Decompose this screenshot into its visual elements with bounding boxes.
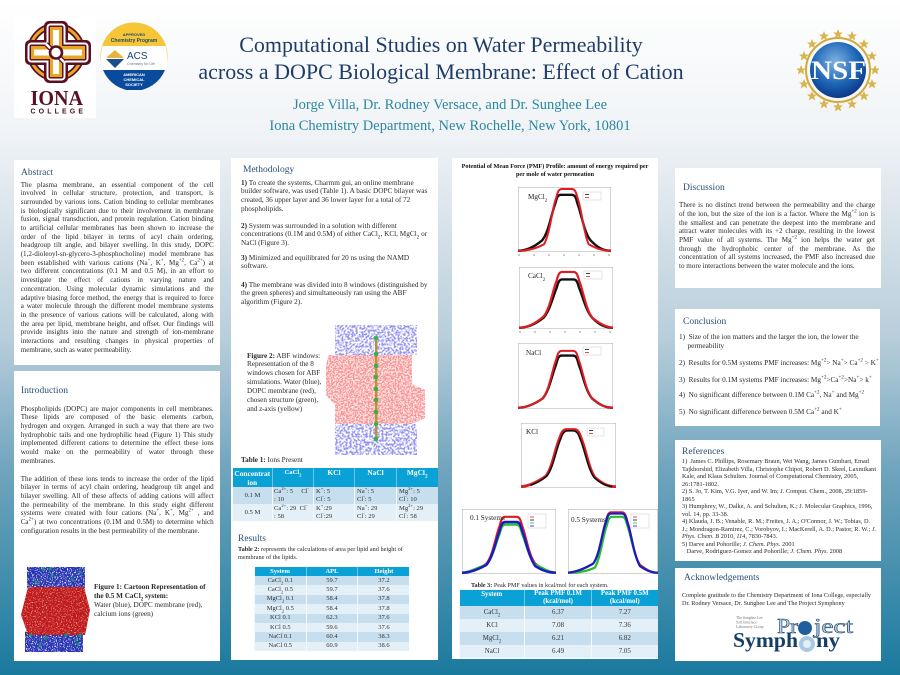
text: reference list: Kale, and Klaus Schulten. Journal of Computational Chemistry, 2005,	[682, 473, 858, 480]
text: method step 4: algorithm (Figure 2).	[241, 298, 302, 306]
table 1: ions present: Cl-: 58	[399, 510, 417, 520]
text: abstract body: headgroup tilt angle, and bilayer swelling. In this study, DOPC	[21, 241, 214, 249]
table 1: ions present	[232, 468, 438, 521]
text: method step 3: software.	[241, 262, 268, 270]
logo: ACS approved chemistry program: AMERICAN	[123, 72, 145, 77]
logo: Iona College: IONA	[30, 86, 84, 110]
table 1: ions present: Na+: 29	[357, 503, 377, 512]
text: abstract body: investigate the effect of cations in varying nature and	[21, 276, 214, 284]
text: acknowledgements body	[682, 592, 871, 607]
logo: ACS approved chemistry program: APPROVED	[123, 32, 145, 37]
text: method step 3: 3) Minimized and equilibrated for 20 ns using the NAMD	[241, 254, 409, 262]
text: method step 1	[241, 179, 428, 213]
text: conclusion list: 4) No significant difference between 0.1M Ca+2, Na+ and Mg+2	[679, 389, 864, 399]
table 2: APL and height	[254, 567, 409, 651]
table 2: APL and height: APL	[325, 568, 338, 574]
table 2: APL and height: MgCl2 0.1	[267, 595, 294, 604]
caption: table 3: Table 3: Peak PMF values in kcal/mol for each system.	[471, 582, 609, 589]
panel: discussion	[675, 168, 881, 288]
text: introduction paragraph 2: bilayer swelling. All of these affects of adding cations will affect	[21, 492, 214, 500]
title: Computational Studies on Water Permeability	[239, 32, 643, 57]
table 1: ions present: Cl-: 5	[316, 493, 331, 502]
table 2: APL and height: 58.4	[326, 595, 338, 602]
text: introduction paragraph 2: configuration results in the best permeability of the membrane.	[21, 527, 199, 535]
table 2: APL and height: 37.8	[378, 595, 390, 602]
table 3: peak PMF values: Peak PMF 0.5M	[601, 590, 649, 597]
text: abstract body: membrane, such as water permeability.	[21, 346, 131, 354]
text: conclusion list: 3) Results for 0.1M systems PMF increases: Mg+2>Ca+2>Na+> k+	[679, 374, 872, 384]
table 1: ions present: Cl-: 10	[399, 493, 417, 502]
text: discussion body: attract water molecules with its +2 charge, resulting in the lowest	[679, 227, 875, 235]
caption: figure 1: Figure 1: Cartoon Representation of	[94, 583, 206, 591]
text: reference list: J.; Mondragon-Ramirez, C.; Vorobyov, I.; MacKerell, A. D.; Pastor, R. W.; J.	[682, 526, 876, 533]
table 2: APL and height: 58.4	[326, 605, 338, 612]
table 3: peak PMF values: 7.36	[619, 622, 631, 629]
text: introduction paragraph 2: The addition of these ions tends to increase the order of the lipid	[21, 475, 214, 483]
text: method step 2: concentrations (0.1M and 0.5M) of either CaCl2, KCl, MgCl2 or	[241, 230, 427, 241]
text: method step 1: created, 36 upper layer and 36 lower layer for a total of 72	[241, 196, 410, 204]
table 2: APL and height: 37.6	[378, 624, 390, 631]
table 2: APL and height: 60.9	[326, 642, 338, 649]
text: reference list: 1) James C. Phillips, Rosemary Braun, Wei Wang, James Gumbart, Emad	[682, 458, 869, 465]
text: abstract body: The plasma membrane, an essential component of the cell	[21, 181, 214, 189]
text: reference list: Tajkhorshid, Elizabeth Villa, Christophe Chipot, Robert D. Skeel, Laxmikant	[682, 466, 876, 473]
text: introduction paragraph 1: Phospholipids (DOPC) are major components in cell membranes.	[21, 405, 214, 413]
text: discussion body: the smallest and can penetrate the deepest into the membrane and	[679, 219, 875, 227]
table 1: ions present: ion	[247, 478, 257, 486]
chart: 0.5 systems: 0.5 Systems	[571, 516, 606, 524]
text: conclusion list: 1) Size of the ion matters and the larger the ion, the lower the	[679, 333, 859, 341]
caption: figure 2: Representation of the 8	[247, 360, 314, 368]
table 2: APL and height: KCl 0.5	[270, 624, 291, 631]
text: introduction paragraph 2: bilayer in terms of acyl chain ordering, headgroup tilt angel and	[21, 483, 214, 491]
text: introduction paragraph 1	[20, 405, 214, 465]
text: reference list	[682, 458, 876, 555]
text: reference list: Darve, Rodriguez-Gomez and Pohorille; J. Chem. Phys. 2008	[687, 548, 842, 555]
text: reference list: 2) S. Jo, T. Kim, V.G. Iyer, and W. Im; J. Comput. Chem., 2008, 29:1859-	[682, 488, 868, 495]
table 3: peak PMF values: Peak PMF 0.1M	[534, 590, 582, 597]
heading: discussion: Discussion	[683, 183, 725, 193]
table 3: peak PMF values: 7.05	[619, 648, 631, 655]
table 3: peak PMF values: 6.49	[552, 648, 564, 655]
text: conclusion list: 5) No significant difference between 0.5M Ca+2 and K+	[679, 406, 842, 416]
text: discussion body: to more interactions between the water molecule and the ions.	[679, 262, 855, 270]
table 1: ions present: K+: 5	[316, 486, 330, 495]
table 2: APL and height: 60.4	[326, 633, 338, 640]
table 1: ions present: Cl-: 29	[357, 510, 375, 520]
text: discussion body	[679, 201, 875, 270]
table 3: peak PMF values: NaCl	[485, 648, 499, 655]
chart: 0.1 systems: 0.1 Systems	[470, 514, 505, 522]
text: introduction paragraph 2: Ca2+) at two concentrations (0.1M and 0.5M) to determine which	[21, 518, 214, 526]
text: introduction paragraph 1: implemented different cations to determine the effect these ions	[21, 439, 214, 447]
text: acknowledgements body: Dr. Rodney Versace, Dr. Sunghee Lee and The Project Symphony	[682, 600, 845, 607]
table 3: peak PMF values: System	[481, 591, 502, 598]
text: abstract body: is biologically significant due to their involvement in membrane	[21, 207, 214, 215]
text: method step 4: 4) The membrane was divided into 8 windows (distinguished by	[241, 281, 428, 289]
chart: NaCl	[518, 343, 613, 409]
logo: Iona College	[14, 17, 96, 118]
table 1: ions present: Ca2+: 29 Cl-	[274, 503, 307, 512]
table 1: ions present: 0.5 M	[245, 509, 260, 516]
text: table 2 description: Table 2: represents the calculations of area per lipid and height of	[238, 546, 403, 553]
table 2: APL and height: 38.6	[378, 642, 390, 649]
chart: CaCl2	[519, 267, 613, 332]
text: acknowledgements body: Complete gratitude to the Chemistry Department of Iona College, especially	[682, 592, 871, 599]
text: reference list: 3) Humphrey, W., Dalke, A. and Schulten, K.; J. Molecular Graphics, 1996,	[682, 503, 872, 510]
panel: methodology and results	[231, 158, 438, 660]
text: introduction paragraph 1: would make on the permeability of water through these	[21, 448, 214, 456]
text: method step 2: NaCl (Figure 3).	[241, 239, 289, 247]
heading: PMF profile: per mole of water permeation	[516, 171, 594, 178]
caption: figure 2: Figure 2: ABF windows:	[247, 352, 320, 360]
text: method step 1: 1) To create the systems, Charmm gui, an online membrane	[241, 179, 414, 187]
chart: 0.5 systems	[568, 509, 658, 574]
text: abstract body: two different concentrations (0.1 M and 0.5 M), in an effort to	[21, 267, 214, 275]
text: abstract body: (1,2-dioleoyl-sn-glycero-3-phosphocholine) model membrane has	[21, 250, 214, 258]
text: abstract body: in the presence of various cations will be calculated, along with	[21, 311, 214, 319]
text: method step 4: the green spheres) and simultaneously ran using the ABF	[241, 289, 407, 297]
caption: figure 1: the 0.5 M CaCl2 system:	[94, 592, 168, 602]
logo: ACS approved chemistry program: Chemistry for Life	[127, 62, 155, 66]
text: abstract body: provide insights into the nature and strength of ion-membrane	[21, 328, 214, 336]
authors and affiliation: Iona Chemistry Department, New Rochelle, New York, 10801	[269, 118, 631, 134]
heading: results: Results	[238, 534, 266, 544]
text: introduction paragraph 1: hydrogen and oxygen. Arranged in such a way that there are two	[21, 422, 214, 430]
caption: figure 1	[94, 583, 206, 618]
table 2: APL and height: 37.6	[378, 614, 390, 621]
heading: PMF profile	[462, 163, 648, 178]
table 2: APL and height: NaCl 0.5	[269, 642, 292, 649]
heading: abstract: Abstract	[21, 168, 53, 178]
logo: NSF: NSF	[811, 56, 866, 85]
caption: figure 2: DOPC membrane (red),	[247, 387, 316, 395]
table 2: APL and height: 37.6	[378, 586, 390, 593]
table 2: APL and height: KCl 0.1	[270, 614, 291, 621]
text: reference list: vol. 14, pp. 33-38.	[682, 511, 728, 518]
authors and affiliation: Jorge Villa, Dr. Rodney Versace, and Dr. Sunghee Lee	[293, 97, 607, 113]
logo: Project Symphony	[733, 614, 854, 652]
text: abstract body: order of the lipid bilayer in terms of acyl chain ordering,	[21, 233, 214, 241]
logo: NSF	[797, 29, 879, 111]
text: abstract body: been established with various cations (Na+, K+, Mg+2, Ca2+) at	[21, 258, 214, 267]
heading: acknowledgements: Acknowledgements	[684, 573, 759, 583]
caption: figure 2: chosen structure (green),	[247, 396, 318, 404]
logo: Project Symphony: Pr	[777, 614, 798, 638]
text: abstract body: to artificial cellular membranes has been shown to increase the	[21, 224, 214, 232]
text: conclusion list	[679, 333, 879, 416]
text: abstract body: involved in cellular structure, protection, and transport, is	[21, 189, 214, 197]
table 1: ions present: Ca2+: 5 Cl-	[274, 486, 309, 495]
figure 1: molecular system	[21, 567, 90, 652]
table 3: peak PMF values: 6.82	[619, 635, 631, 642]
text: method step 1: builder software, was used (Table 1). A basic DOPC bilayer was	[241, 187, 427, 195]
table 3: peak PMF values: CaCl2	[484, 609, 500, 618]
table 2: APL and height: CaCl2 0.1	[268, 577, 293, 585]
caption: figure 2: and z-axis (yellow)	[247, 405, 302, 413]
text: introduction paragraph 1: hydrophobic tails and one hydrophilic head (Figure 1) This study	[21, 431, 214, 439]
logo: ACS approved chemistry program: SOCIETY	[125, 82, 143, 87]
text: abstract body: fusion, signal transduction, and protein regulation. Cation binding	[21, 215, 214, 223]
table 2: APL and height: 62.3	[326, 614, 338, 621]
heading: introduction: Introduction	[21, 386, 68, 396]
table 3: peak PMF values: KCl	[486, 622, 498, 629]
table 1: ions present: CaCl2	[285, 469, 301, 477]
text: method step 4	[241, 281, 428, 306]
table 2: APL and height: MgCl2 0.5	[267, 605, 294, 613]
table 1: ions present: : 10	[274, 496, 284, 502]
text: method step 2	[241, 222, 428, 247]
table 2: APL and height: 37.8	[378, 605, 390, 612]
text: method step 2: 2) System was surrounded in a solution with different	[241, 222, 397, 230]
table 2: APL and height: 59.7	[326, 577, 338, 584]
table 3: peak PMF values: 7.08	[552, 622, 564, 629]
authors and affiliation	[269, 97, 631, 134]
table 3: peak PMF values: MgCl2	[483, 635, 501, 644]
text: table 2 description: membrane of the lipids.	[238, 554, 297, 561]
table 3: peak PMF values: (kcal/mol)	[543, 598, 573, 605]
logo: Iona College: COLLEGE	[30, 108, 83, 116]
panel: conclusion	[675, 309, 880, 426]
panel: abstract	[14, 160, 220, 365]
table 1: ions present: Cl-:29	[316, 510, 332, 520]
text: introduction paragraph 2: systems were created with four cations (Na+, K+, Mg2+ , and	[21, 509, 214, 517]
logo: ACS approved chemistry program: Chemistry Program	[111, 38, 158, 44]
caption: table 1: Table 1: Ions Present	[241, 456, 303, 464]
text: abstract body	[20, 181, 214, 354]
text: introduction paragraph 1: These lipids are composed of the basic elements carbon,	[21, 413, 214, 421]
panel: acknowledgements	[675, 568, 881, 661]
text: table 2 description	[238, 546, 403, 561]
chart: MgCl2: MgCl2	[528, 193, 548, 204]
logo: Project Symphony: Laboratory Group	[736, 625, 764, 629]
title	[198, 32, 684, 84]
table 1: ions present: Na+: 5	[357, 486, 374, 495]
text: introduction paragraph 2	[20, 475, 214, 535]
text: abstract body: a water molecule through the different model membrane systems	[21, 302, 214, 310]
table 3: peak PMF values: 6.37	[552, 609, 564, 616]
table 2: APL and height: NaCl 0.1	[269, 633, 292, 640]
heading: references: References	[682, 447, 724, 457]
table 1: ions present: K+:29	[316, 503, 332, 512]
table 1: ions present: : 58	[274, 512, 284, 520]
chart: KCl: KCl	[526, 428, 538, 436]
heading: PMF profile: Potential of Mean Force (PMF) Profile: amount of energy required per	[462, 163, 648, 170]
logo: ACS approved chemistry program	[100, 22, 168, 90]
text: introduction paragraph 2: the permeability of the membrane. In this study eight different	[21, 501, 214, 509]
logo: Project Symphony: ject	[813, 614, 853, 638]
text: method step 3	[241, 254, 409, 270]
logo: Project Symphony: Symph	[733, 628, 798, 652]
text: conclusion list: permeability	[688, 342, 724, 350]
table 1: ions present: Concentrat	[234, 468, 270, 478]
text: abstract body: adaptive biasing force method, the energy that is required to force	[21, 294, 214, 302]
charts: PMF curves	[462, 187, 658, 574]
text: abstract body: surrounded by various ions. Cation binding to cellular membranes	[21, 198, 214, 206]
text: discussion body: PMF value of all systems. The Mg+2 ion helps the water get	[679, 236, 875, 244]
table 1: ions present: MgCl2	[407, 468, 428, 479]
caption: figure 2: windows chosen for ABF	[247, 369, 320, 377]
text: abstract body: concentration. Using molecular dynamic simulations and the	[21, 285, 214, 293]
text: reference list: 26:1781-1802.	[682, 481, 719, 488]
table 2: APL and height: 37.2	[378, 577, 390, 584]
chart: MgCl2	[518, 187, 611, 255]
text: conclusion list: 2) Results for 0.5M systems PMF increases: Mg+2> Na+> Ca+2 > K+	[679, 357, 879, 367]
caption: figure 1: Water (blue), DOPC membrane (red),	[94, 601, 202, 609]
table 2: APL and height: CaCl2 0.5	[268, 586, 293, 594]
heading: conclusion: Conclusion	[683, 317, 726, 327]
text: reference list: 1865	[682, 496, 695, 503]
text: abstract body: interactions and resulting changes in physical properties of	[21, 337, 214, 345]
table 3: peak PMF values: 6.21	[552, 635, 564, 642]
caption: figure 1: calcium ions (green)	[94, 610, 153, 618]
heading: methodology: Methodology	[243, 165, 294, 175]
logo: Project Symphony: Soft Interface	[736, 620, 757, 624]
table 1: ions present: 0.1 M	[245, 492, 260, 499]
caption: figure 2: simulations. Water (blue),	[247, 378, 321, 386]
logo: Project Symphony: The Sunghee Lee	[736, 616, 763, 620]
figure 2: ABF windows	[326, 325, 425, 455]
table 1: ions present: NaCl	[367, 468, 384, 477]
table 3: peak PMF values: (kcal/mol)	[610, 598, 640, 605]
text: discussion body: There is no distinct trend between the permeability and the charge	[679, 201, 875, 209]
table 1: ions present: Mg2+: 29	[399, 503, 423, 512]
caption: figure 2	[247, 352, 321, 413]
text: introduction paragraph 1: membranes.	[21, 457, 55, 465]
text: discussion body: concentration of all systems increased, the PMF also increased due	[679, 253, 875, 261]
table 2: APL and height: 59.7	[326, 586, 338, 593]
table 2: APL and height: Height	[374, 568, 393, 574]
chart: 0.1 systems	[462, 509, 556, 574]
table 3: peak PMF values: 7.27	[619, 609, 631, 616]
panel: references	[675, 440, 881, 561]
chart: KCl	[521, 423, 616, 488]
table 1: ions present: KCl	[327, 468, 341, 477]
table 2: APL and height: System	[270, 568, 290, 574]
table 1: ions present: Mg2+: 5	[399, 486, 420, 495]
text: abstract body: the area per lipid, membrane height, and offset. Our findings will	[21, 320, 214, 328]
logo: ACS approved chemistry program: CHEMICAL	[123, 77, 145, 82]
panel: introduction	[14, 371, 220, 661]
chart: CaCl2: CaCl2	[528, 272, 546, 282]
logo: Project Symphony: ny	[816, 628, 841, 652]
table 2: APL and height: 59.6	[326, 624, 338, 631]
logo: ACS approved chemistry program: ACS	[127, 51, 148, 62]
text: discussion body: of the ion, but the size of the ion is a factor. Where the Mg+2 ion is	[679, 210, 875, 218]
text: reference list: Phys. Chem. B 2010, 114, 7830-7843.	[682, 533, 777, 540]
table 1: ions present: Cl-: 5	[357, 493, 372, 502]
text: reference list: 4) Klauda, J. B.; Venable, R. M.; Freites, J. A.; O'Connor, J. W.; Tobias, D.	[682, 518, 870, 525]
panel: PMF profile	[452, 158, 658, 659]
title: across a DOPC Biological Membrane: Effect of Cation	[198, 58, 684, 84]
text: discussion body: through the hydrophobic center of the membrane. As the	[679, 245, 875, 253]
chart: NaCl: NaCl	[526, 349, 541, 357]
text: method step 1: phospholipids.	[241, 205, 284, 213]
table 2: APL and height: 38.3	[378, 633, 390, 640]
text: reference list: 5) Darve and Pohorille; J. Chem. Phys. 2001	[682, 541, 795, 548]
table 3: peak PMF values	[459, 590, 658, 658]
